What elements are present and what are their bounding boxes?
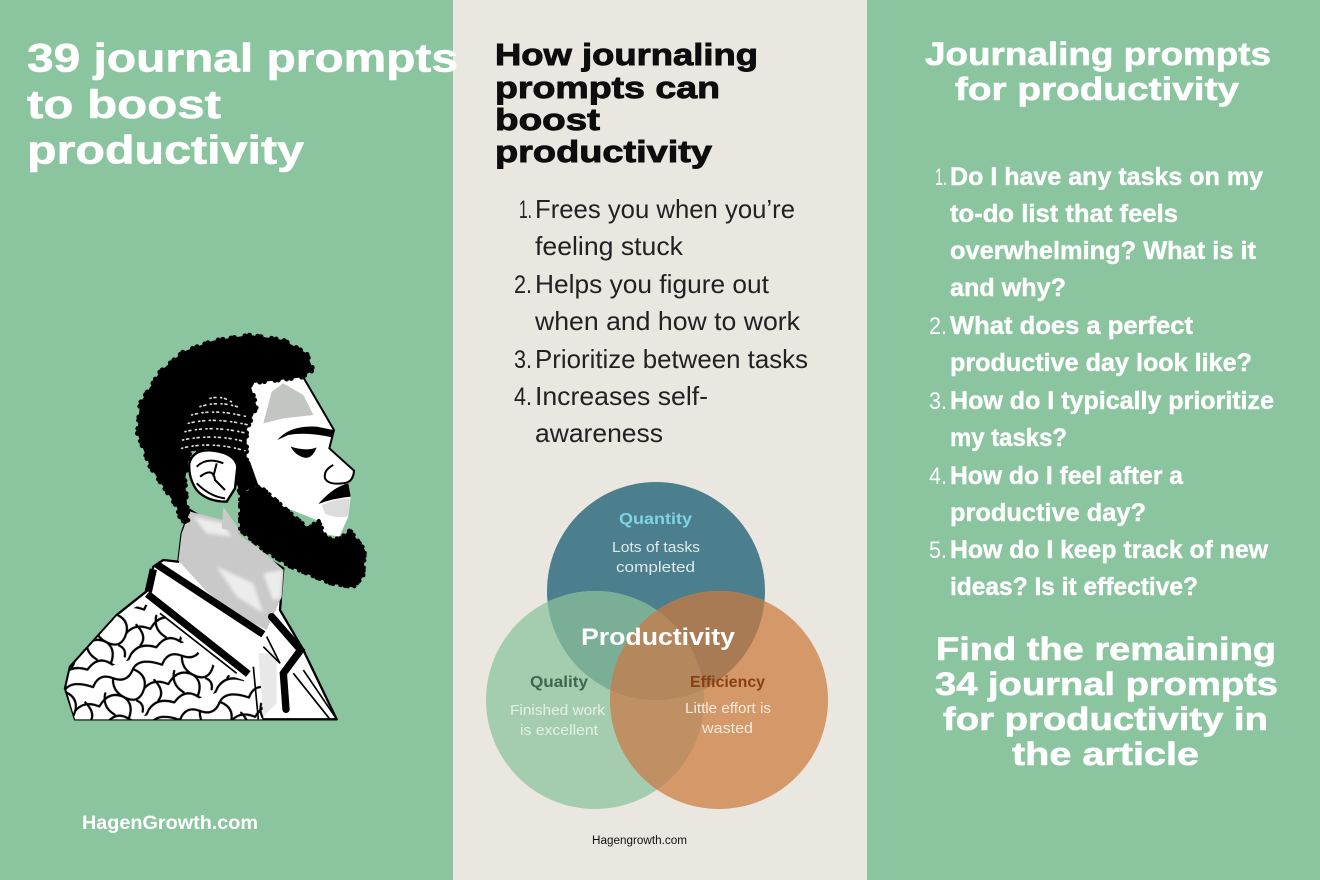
title: to boost bbox=[27, 83, 221, 127]
sideburn bbox=[240, 460, 258, 493]
numbered prompts list: How do I keep track of new bbox=[950, 536, 1269, 564]
face bbox=[245, 377, 354, 537]
footer url: Hagengrowth.com bbox=[592, 835, 687, 847]
numbered benefits list: 4. bbox=[514, 383, 532, 411]
numbered prompts list: Do I have any tasks on my bbox=[950, 163, 1263, 191]
label: quantity bbox=[612, 511, 700, 576]
eyebrow bbox=[277, 426, 333, 440]
neck shading bbox=[178, 512, 283, 630]
heading bbox=[495, 37, 758, 169]
numbered prompts list: How do I feel after a bbox=[950, 462, 1184, 490]
ear bbox=[189, 450, 237, 502]
numbered benefits list: Increases self- bbox=[535, 381, 708, 411]
panel: how journaling helps bbox=[453, 0, 867, 880]
label: efficiency: Efficiency bbox=[690, 674, 765, 691]
panel: left background with portrait bbox=[0, 0, 453, 880]
numbered prompts list: and why? bbox=[950, 274, 1066, 302]
forehead shading bbox=[263, 383, 313, 423]
brain-like shirt pattern bbox=[66, 603, 263, 719]
panel: journaling prompts bbox=[867, 0, 1320, 880]
hair bbox=[137, 335, 313, 523]
neck highlights bbox=[193, 517, 283, 613]
label: quality: Quality bbox=[530, 674, 588, 691]
label: efficiency bbox=[685, 674, 771, 737]
overlap: quality and efficiency bbox=[610, 690, 704, 790]
numbered benefits list: 2. bbox=[514, 271, 532, 299]
call to action bbox=[935, 631, 1278, 772]
closed eye bbox=[291, 447, 317, 458]
numbered benefits list: awareness bbox=[535, 418, 663, 448]
numbered benefits list: feeling stuck bbox=[535, 231, 684, 261]
numbered benefits list: Helps you figure out bbox=[535, 269, 770, 299]
label: quantity: completed bbox=[616, 560, 695, 576]
label: quantity: Quantity bbox=[619, 511, 692, 528]
label: productivity: Productivity bbox=[581, 624, 736, 651]
heading: productivity bbox=[495, 134, 713, 169]
call to action: Find the remaining bbox=[936, 631, 1276, 667]
circle: quantity bbox=[547, 482, 765, 700]
label: quality bbox=[510, 674, 606, 739]
heading: for productivity bbox=[955, 71, 1239, 107]
numbered prompts list: overwhelming? What is it bbox=[950, 237, 1257, 265]
mouth and lips bbox=[318, 483, 351, 504]
overlap: centre bbox=[610, 611, 703, 700]
numbered benefits list bbox=[514, 194, 808, 448]
numbered prompts list: my tasks? bbox=[950, 424, 1067, 452]
numbered prompts list: 2. bbox=[929, 313, 947, 340]
label: quality: is excellent bbox=[520, 723, 598, 739]
title: 39 journal prompts bbox=[27, 36, 458, 80]
numbered benefits list: when and how to work bbox=[534, 306, 801, 336]
label: quantity: Lots of tasks bbox=[612, 540, 700, 556]
site url: HagenGrowth.com bbox=[82, 813, 258, 834]
beard bbox=[240, 486, 365, 587]
numbered benefits list: Frees you when you’re bbox=[535, 194, 795, 224]
label: quality: Finished work bbox=[510, 703, 606, 719]
face profile and nose line bbox=[303, 377, 354, 484]
heading: prompts can bbox=[495, 70, 720, 105]
portrait illustration of a bearded man in profile bbox=[65, 335, 365, 719]
circle: efficiency bbox=[610, 591, 828, 809]
overlap: quantity and quality bbox=[548, 591, 656, 690]
call to action: for productivity in bbox=[943, 701, 1268, 737]
label: efficiency: Little effort is bbox=[685, 701, 771, 717]
numbered prompts list: What does a perfect bbox=[950, 312, 1194, 340]
numbered prompts list: 4. bbox=[929, 463, 947, 490]
numbered prompts list: 5. bbox=[929, 537, 947, 564]
circle: quality bbox=[486, 591, 704, 809]
collar bbox=[147, 564, 263, 674]
numbered benefits list: Prioritize between tasks bbox=[535, 344, 808, 374]
heading: boost bbox=[495, 102, 600, 137]
numbered prompts list bbox=[929, 163, 1274, 601]
call to action: the article bbox=[1012, 736, 1199, 772]
numbered prompts list: ideas? Is it effective? bbox=[950, 573, 1198, 601]
shirt and shoulders bbox=[65, 510, 337, 719]
numbered prompts list: to-do list that feels bbox=[950, 200, 1178, 228]
numbered benefits list: 1. bbox=[519, 196, 532, 224]
numbered prompts list: productive day look like? bbox=[950, 349, 1252, 377]
title: productivity bbox=[27, 128, 305, 172]
numbered prompts list: 1. bbox=[935, 164, 947, 191]
numbered benefits list: 3. bbox=[514, 346, 532, 374]
shirt placket shading bbox=[258, 653, 277, 717]
heading: How journaling bbox=[495, 37, 758, 72]
venn diagram bbox=[486, 482, 828, 809]
label: efficiency: wasted bbox=[701, 721, 753, 737]
title bbox=[27, 36, 458, 172]
numbered prompts list: How do I typically prioritize bbox=[950, 387, 1274, 415]
heading bbox=[925, 36, 1271, 107]
numbered prompts list: 3. bbox=[929, 388, 947, 415]
heading: Journaling prompts bbox=[925, 36, 1271, 72]
call to action: 34 journal prompts bbox=[935, 666, 1278, 702]
numbered prompts list: productive day? bbox=[950, 499, 1146, 527]
overlap: quantity and efficiency bbox=[657, 591, 764, 689]
curly hair highlights bbox=[182, 397, 248, 451]
